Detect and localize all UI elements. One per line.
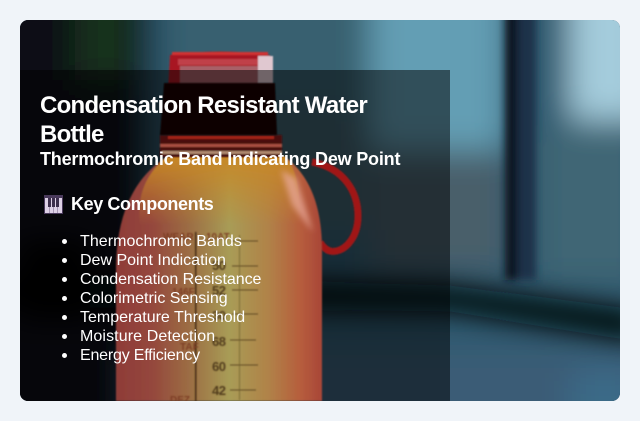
list: components: Energy Efficiency: [80, 347, 200, 364]
bottle measurement scale: WEAR: [163, 232, 194, 243]
bottle measurement scale: 60: [212, 359, 226, 374]
bottle measurement scale: 50: [212, 258, 226, 273]
list: components: Condensation Resistance: [80, 271, 261, 288]
heading: key components: Key Components: [71, 194, 213, 214]
list: components: Colorimetric Sensing: [80, 290, 228, 307]
bottle measurement scale: [163, 232, 258, 406]
bottle measurement scale: 42: [212, 383, 226, 398]
bottle measurement scale: 146F: [172, 287, 195, 298]
bottle measurement scale: 10AT: [206, 232, 230, 243]
icon: piano keys: [44, 195, 63, 214]
title: Bottle: [40, 121, 104, 148]
list: components: Temperature Threshold: [80, 309, 245, 326]
list: components: Thermochromic Bands: [80, 233, 242, 250]
bottle collar: [160, 83, 277, 135]
panel: text overlay: [20, 70, 450, 401]
bottle measurement scale: 68: [212, 334, 226, 349]
subtitle: Thermochromic Band Indicating Dew Point: [40, 149, 400, 169]
title: [40, 92, 368, 148]
bottle handle: [312, 162, 358, 251]
bottle body: [116, 156, 322, 401]
title: Condensation Resistant Water: [40, 92, 367, 119]
list: components: Dew Point Indication: [80, 252, 226, 269]
bottle cap top: [168, 50, 274, 84]
list: components: [62, 233, 261, 364]
bottle measurement scale: 30: [212, 308, 226, 323]
bottle measurement scale: TAF: [180, 342, 199, 353]
bottle illustration: [115, 82, 362, 401]
list: components: Moisture Detection: [80, 328, 215, 345]
bottle measurement scale: 52: [212, 283, 226, 298]
bottle neck ring: [160, 135, 282, 157]
